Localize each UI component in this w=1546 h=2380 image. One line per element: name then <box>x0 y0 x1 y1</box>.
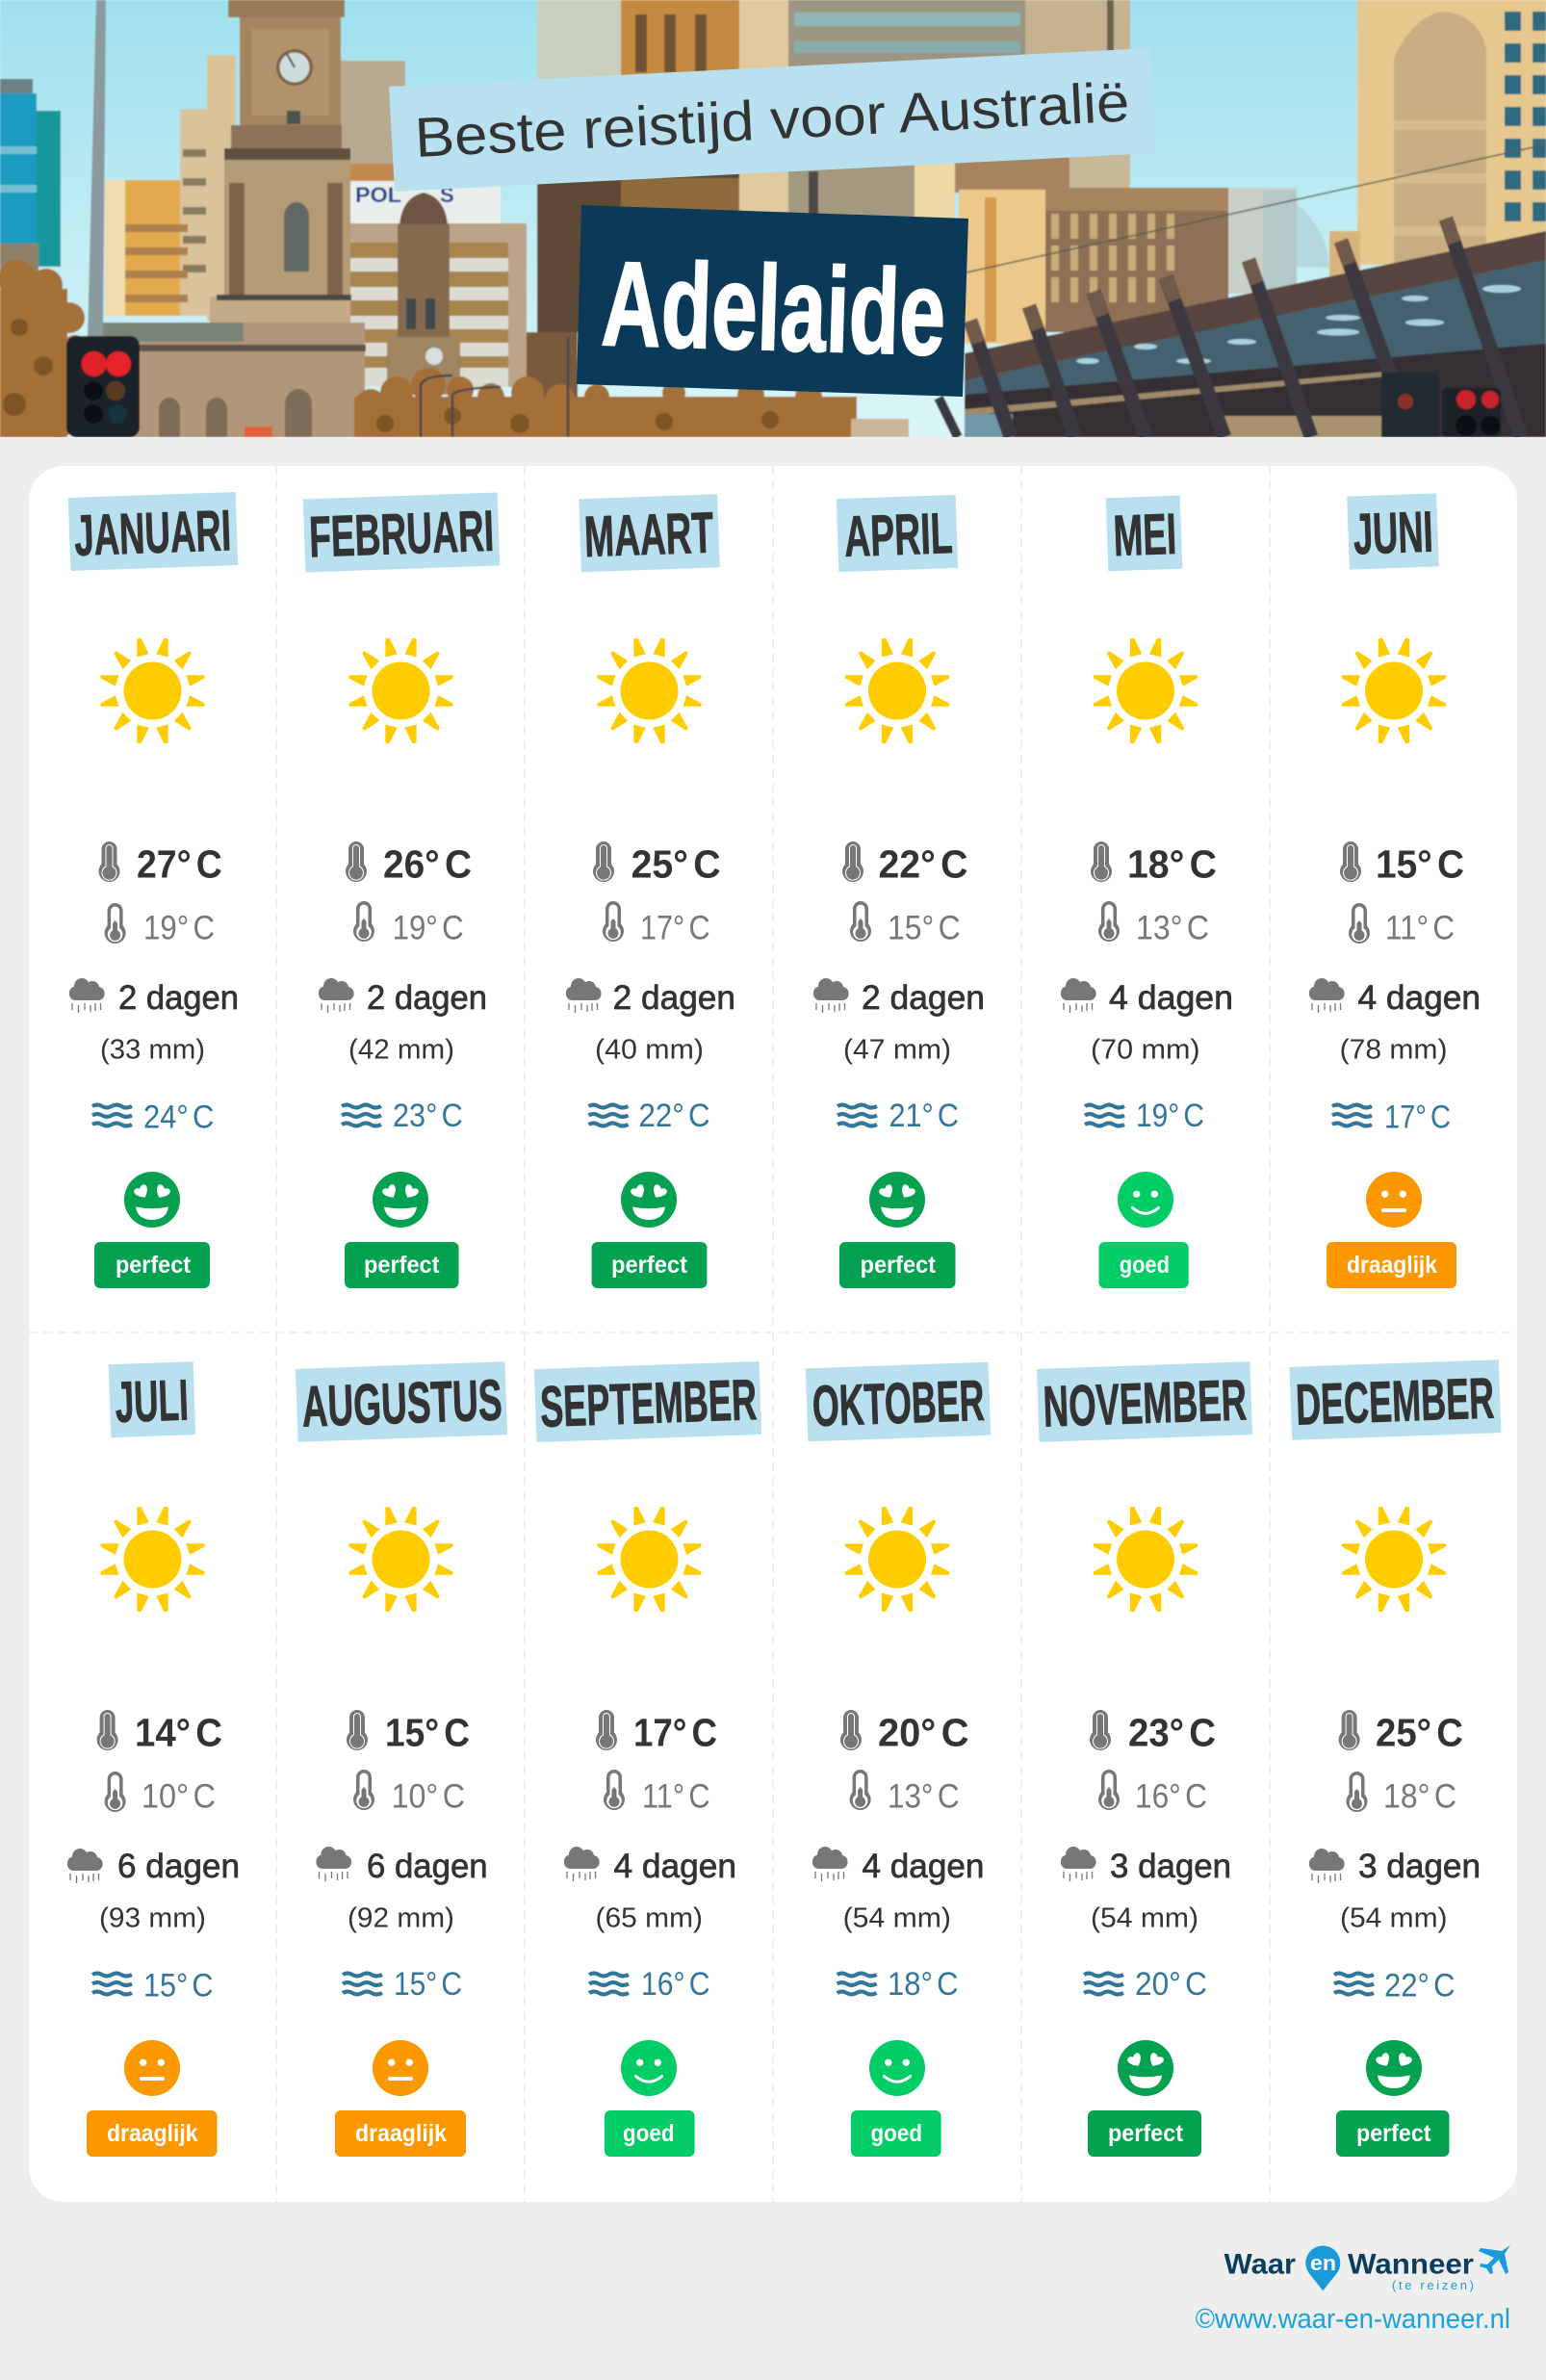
high temperature <box>1339 1710 1463 1754</box>
sea temperature <box>1084 1966 1207 2003</box>
rating smiley <box>869 1172 925 1228</box>
high temperature <box>1091 841 1217 886</box>
high temperature <box>1090 1710 1216 1754</box>
sea temperature <box>1085 1098 1204 1134</box>
month label <box>1347 493 1439 570</box>
rain days <box>1309 978 1481 1017</box>
low temperature: 11° C <box>642 1777 710 1816</box>
high temperature: 15° C <box>1376 841 1464 886</box>
high temperature <box>346 841 472 886</box>
month: januari <box>68 492 239 1288</box>
rainfall: (54 mm) <box>1340 1902 1448 1933</box>
high temperature: 27° C <box>137 841 222 886</box>
month: augustus <box>296 1361 507 2157</box>
month label <box>837 495 958 572</box>
rainfall: (54 mm) <box>843 1902 951 1933</box>
high temperature <box>596 1710 717 1754</box>
high temperature: 25° C <box>631 841 721 886</box>
month label <box>806 1362 991 1441</box>
small tower <box>399 193 448 224</box>
rating badge: perfect <box>116 1252 192 1279</box>
high temperature: 23° C <box>1128 1710 1216 1754</box>
sea temperature: 20° C <box>1135 1966 1207 2003</box>
month: april <box>813 495 985 1288</box>
sea temperature: 21° C <box>889 1098 959 1134</box>
month label: OKTOBER <box>812 1368 986 1438</box>
rain days: 4 dagen <box>614 1848 736 1885</box>
month: december <box>1289 1359 1501 2157</box>
rating badge: perfect <box>861 1252 937 1279</box>
rating smiley <box>373 2040 428 2096</box>
low temperature: 10° C <box>142 1777 216 1816</box>
rating smiley <box>621 2040 677 2096</box>
low temperature <box>105 1772 216 1816</box>
rating badge <box>1336 2110 1450 2157</box>
traffic lights <box>66 336 140 437</box>
icon: sun <box>348 1507 452 1612</box>
icon: sun <box>348 638 452 743</box>
high temperature <box>98 841 222 886</box>
icon: sun <box>597 1507 701 1612</box>
logo: Waar en Wanneer: Waar <box>1224 2249 1296 2281</box>
main clock tower <box>228 0 345 17</box>
rating badge <box>851 2110 941 2157</box>
icon: sun <box>1342 1507 1446 1612</box>
sea temperature <box>837 1098 959 1134</box>
icon: sun <box>1094 638 1198 743</box>
low temperature: 18° C <box>1383 1777 1456 1816</box>
sea temperature: 17° C <box>1384 1099 1451 1136</box>
rating badge <box>87 2110 218 2157</box>
high temperature: 14° C <box>135 1710 222 1754</box>
logo: Waar en Wanneer <box>1224 2245 1510 2292</box>
walkway <box>964 343 1546 437</box>
rating badge <box>1099 1242 1189 1288</box>
low temperature <box>850 901 961 947</box>
rainfall: (54 mm) <box>1091 1902 1198 1933</box>
high temperature: 25° C <box>1376 1710 1463 1754</box>
low temperature: 11° C <box>1385 909 1455 947</box>
brown office building <box>959 190 1045 344</box>
rating smiley <box>869 2040 925 2096</box>
sea temperature: 18° C <box>888 1966 959 2003</box>
rain days: 6 dagen <box>367 1848 488 1885</box>
sea temperature <box>92 1968 214 2005</box>
low temperature <box>603 901 710 947</box>
month: februari <box>303 492 500 1288</box>
month label <box>296 1361 507 1442</box>
rain days <box>564 1847 736 1885</box>
rain days <box>812 1847 984 1885</box>
rain days: 2 dagen <box>367 979 487 1017</box>
low temperature: 17° C <box>640 909 710 947</box>
sea temperature: 22° C <box>1384 1968 1456 2005</box>
sea temperature <box>1332 1099 1451 1136</box>
month label: MAART <box>583 500 714 569</box>
pole <box>88 0 106 337</box>
high temperature <box>840 1710 968 1754</box>
rainfall: (93 mm) <box>99 1902 206 1933</box>
month label: JUNI <box>1353 500 1434 566</box>
sea temperature: 19° C <box>1136 1098 1204 1134</box>
rating badge <box>592 1242 707 1288</box>
month: maart <box>566 494 735 1288</box>
sea temperature: 15° C <box>143 1968 214 2005</box>
header photo: Adelaide skyline: POL <box>355 183 401 207</box>
city name banner <box>577 205 968 397</box>
left teal building <box>0 93 37 267</box>
high temperature: 20° C <box>878 1710 968 1754</box>
month label <box>1037 1361 1252 1442</box>
rain days: 2 dagen <box>118 979 239 1017</box>
rainfall: (92 mm) <box>348 1902 454 1933</box>
rain days <box>1061 978 1233 1017</box>
sea temperature: 23° C <box>393 1098 463 1134</box>
month label <box>109 1361 195 1437</box>
low temperature: 15° C <box>888 909 961 947</box>
high temperature <box>593 841 721 886</box>
rating badge <box>94 1242 210 1288</box>
low temperature <box>353 1770 465 1816</box>
white calendar card <box>29 466 1517 2202</box>
month label <box>1106 496 1182 571</box>
rating smiley <box>1118 2040 1173 2096</box>
rating badge <box>605 2110 695 2157</box>
high temperature <box>842 841 968 886</box>
rating badge <box>1088 2110 1201 2157</box>
sea temperature: 15° C <box>394 1966 462 2003</box>
sea temperature: 22° C <box>639 1098 710 1134</box>
month label <box>68 492 238 571</box>
back tan buildings <box>333 61 405 167</box>
icon: airplane <box>1479 2245 1510 2274</box>
trees <box>0 260 857 438</box>
rainfall: (65 mm) <box>595 1902 703 1933</box>
high temperature <box>1340 841 1464 886</box>
grid dividers <box>29 466 1517 2202</box>
icon: sun <box>1094 1507 1198 1612</box>
orange building <box>124 179 181 317</box>
month: juni <box>1309 493 1481 1288</box>
high temperature <box>97 1710 222 1754</box>
sea temperature <box>342 1098 463 1134</box>
low temperature: 19° C <box>393 909 464 947</box>
month: juli <box>67 1361 240 2157</box>
icon: sun <box>100 638 204 743</box>
sea temperature: 16° C <box>641 1966 710 2003</box>
sea temperature <box>589 1966 710 2003</box>
icon: sun <box>845 638 949 743</box>
month: november <box>1037 1361 1252 2157</box>
rain days: 6 dagen <box>117 1848 240 1885</box>
month label: APRIL <box>843 501 954 569</box>
rating badge: perfect <box>611 1252 688 1279</box>
mid right grey building <box>1227 187 1298 295</box>
rating badge <box>335 2110 466 2157</box>
rating smiley <box>1366 1172 1422 1228</box>
rainfall: (33 mm) <box>100 1034 205 1065</box>
rainfall: (70 mm) <box>1091 1034 1200 1065</box>
low temperature <box>850 1770 959 1816</box>
high temperature: 15° C <box>385 1710 470 1754</box>
icon: sun <box>845 1507 949 1612</box>
low temperature: 13° C <box>888 1777 959 1816</box>
sea temperature <box>589 1098 710 1134</box>
month label: JANUARI <box>73 498 232 568</box>
rain days: 3 dagen <box>1110 1848 1231 1885</box>
low temperature: 16° C <box>1135 1777 1207 1816</box>
title banner <box>389 48 1155 192</box>
low temperature: 19° C <box>143 909 215 947</box>
low temperature <box>105 903 215 947</box>
header photo: Adelaide skyline: S <box>440 183 454 207</box>
month label: MEI <box>1113 502 1177 568</box>
rain days: 2 dagen <box>862 979 985 1017</box>
low temperature: 10° C <box>392 1777 465 1816</box>
month label: FEBRUARI <box>308 499 495 569</box>
stone hall <box>103 323 365 437</box>
month label <box>579 494 720 572</box>
high temperature: 17° C <box>633 1710 717 1754</box>
rain days <box>69 978 239 1017</box>
rating badge <box>345 1242 458 1288</box>
sea temperature <box>343 1966 462 2003</box>
month label: SEPTEMBER <box>539 1367 758 1439</box>
rating smiley <box>373 1172 428 1228</box>
rating smiley <box>1366 2040 1422 2096</box>
Polaris building <box>343 181 501 225</box>
rating badge: goed <box>870 2120 922 2147</box>
month label: AUGUSTUS <box>301 1367 503 1439</box>
rating smiley <box>124 1172 180 1228</box>
rain days <box>319 978 487 1017</box>
rain days: 4 dagen <box>863 1848 984 1885</box>
rain days: 4 dagen <box>1357 979 1481 1017</box>
icon: sun <box>100 1507 204 1612</box>
rating badge: draaglijk <box>355 2120 447 2147</box>
rating badge <box>839 1242 955 1288</box>
high temperature: 18° C <box>1127 841 1217 886</box>
rating badge: perfect <box>1108 2120 1184 2147</box>
sea temperature: 24° C <box>143 1099 214 1136</box>
rating badge: draaglijk <box>1347 1252 1437 1279</box>
logo: Waar en Wanneer: (te reizen) <box>1392 2278 1474 2292</box>
low temperature <box>1098 901 1209 947</box>
sea temperature <box>837 1966 959 2003</box>
rainfall: (78 mm) <box>1340 1034 1448 1065</box>
low temperature <box>1346 1772 1456 1816</box>
rating badge <box>1327 1242 1456 1288</box>
rating smiley <box>1118 1172 1173 1228</box>
sea temperature <box>1334 1968 1456 2005</box>
low temperature <box>604 1770 710 1816</box>
low temperature <box>353 901 464 947</box>
rating badge: goed <box>623 2120 675 2147</box>
low temperature <box>1349 903 1455 947</box>
rain days <box>813 978 985 1017</box>
icon: map pin <box>1305 2245 1340 2290</box>
rating badge: perfect <box>364 1252 440 1279</box>
high temperature <box>347 1710 470 1754</box>
title banner: Beste reistijd voor Australië <box>413 70 1131 169</box>
month label <box>303 492 500 573</box>
rain days <box>1061 1847 1231 1885</box>
rain days: 2 dagen <box>613 979 735 1017</box>
month: september <box>534 1361 761 2157</box>
rating badge: goed <box>1120 1252 1170 1279</box>
rating badge: draaglijk <box>107 2120 198 2147</box>
right tall building <box>1357 0 1546 265</box>
rating badge: perfect <box>1356 2120 1431 2147</box>
low temperature: 13° C <box>1136 909 1209 947</box>
icon: sun <box>597 638 701 743</box>
sea temperature <box>92 1099 214 1136</box>
rain days: 3 dagen <box>1358 1848 1481 1885</box>
wire <box>966 144 1546 272</box>
low temperature <box>1098 1770 1207 1816</box>
high temperature: 26° C <box>383 841 472 886</box>
high temperature: 22° C <box>878 841 968 886</box>
rating smiley <box>621 1172 677 1228</box>
rainfall: (42 mm) <box>348 1034 454 1065</box>
far buildings <box>537 0 621 87</box>
rain days <box>316 1847 488 1885</box>
month label: NOVEMBER <box>1043 1367 1248 1439</box>
rainfall: (40 mm) <box>595 1034 704 1065</box>
month: oktober <box>806 1362 991 2157</box>
month: mei <box>1061 496 1233 1288</box>
website credit: ©www.waar-en-wanneer.nl <box>1196 2304 1510 2335</box>
month label <box>534 1361 761 1442</box>
city name banner: Adelaide <box>600 237 947 381</box>
month label: JULI <box>115 1367 190 1435</box>
icon: sun <box>1342 638 1446 743</box>
header photo: Adelaide skyline <box>0 0 1546 438</box>
logo: Waar en Wanneer: Wanneer <box>1348 2249 1474 2281</box>
rating smiley <box>124 2040 180 2096</box>
icon: map pin: en <box>1310 2251 1336 2275</box>
rainfall: (47 mm) <box>843 1034 951 1065</box>
rain days: 4 dagen <box>1109 979 1233 1017</box>
